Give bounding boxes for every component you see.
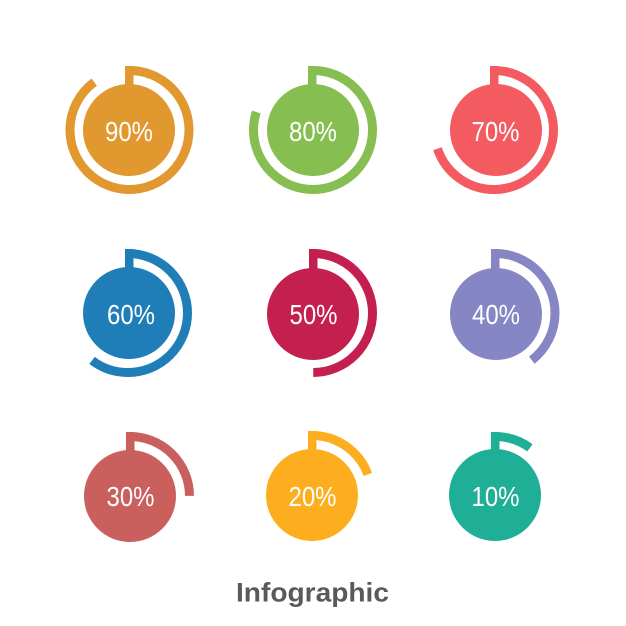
gauge: 60%: [68, 249, 188, 372]
gauge: 90%: 90%: [105, 116, 153, 147]
gauge: 30%: [70, 432, 190, 556]
gauge: 50%: [254, 249, 372, 372]
gauge: 70%: 70%: [472, 116, 520, 147]
gauge: 20%: 20%: [288, 481, 336, 512]
gauge: 50%: 50%: [290, 299, 338, 330]
gauge: 30%: 30%: [106, 481, 154, 512]
gauge: 10%: [436, 432, 554, 556]
title: Infographic: [236, 578, 389, 608]
gauge: 70%: [434, 66, 554, 190]
gauge: 90%: [70, 66, 189, 190]
gauge: 40%: [436, 249, 555, 372]
gauge: 20%: [252, 431, 372, 554]
gauge: 60%: 60%: [107, 299, 155, 330]
gauge: 80%: [254, 66, 372, 190]
gauge: 80%: 80%: [289, 116, 337, 147]
gauge: 40%: 40%: [472, 299, 520, 330]
gauge: 10%: 10%: [472, 481, 520, 512]
